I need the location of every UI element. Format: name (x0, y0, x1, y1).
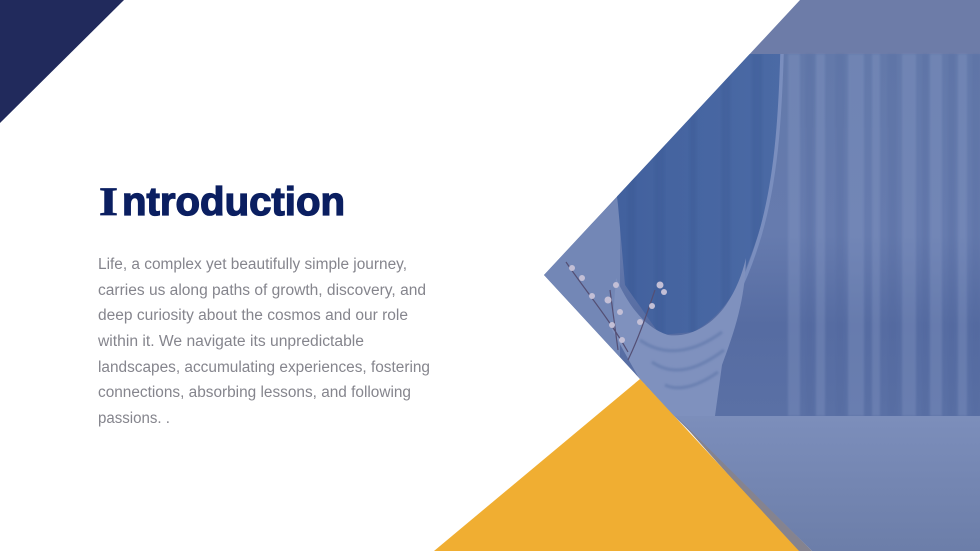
blossom branches (566, 262, 667, 360)
body text: Life, a complex yet beautifully simple journey, (98, 256, 407, 273)
body text: connections, absorbing lessons, and following (98, 384, 411, 401)
sheer curtain (540, 54, 980, 416)
title: ntroduction (122, 180, 345, 224)
photo: curtains in blue duotone (540, 0, 980, 551)
yellow triangle (434, 379, 799, 551)
title: I (99, 179, 118, 224)
floor (674, 416, 980, 551)
body text: landscapes, accumulating experiences, fostering (98, 359, 430, 376)
dark curtain (617, 54, 784, 334)
drape (612, 258, 746, 416)
body text: passions. . (98, 410, 170, 427)
grey edge strip (676, 416, 812, 551)
body text: carries us along paths of growth, discovery, and (98, 282, 426, 299)
corner triangle: navy (0, 0, 124, 123)
body text (97, 256, 430, 427)
ceiling (750, 0, 980, 54)
side window (544, 198, 620, 358)
body text: within it. We navigate its unpredictable (97, 333, 364, 350)
body text: deep curiosity about the cosmos and our role (98, 307, 408, 324)
